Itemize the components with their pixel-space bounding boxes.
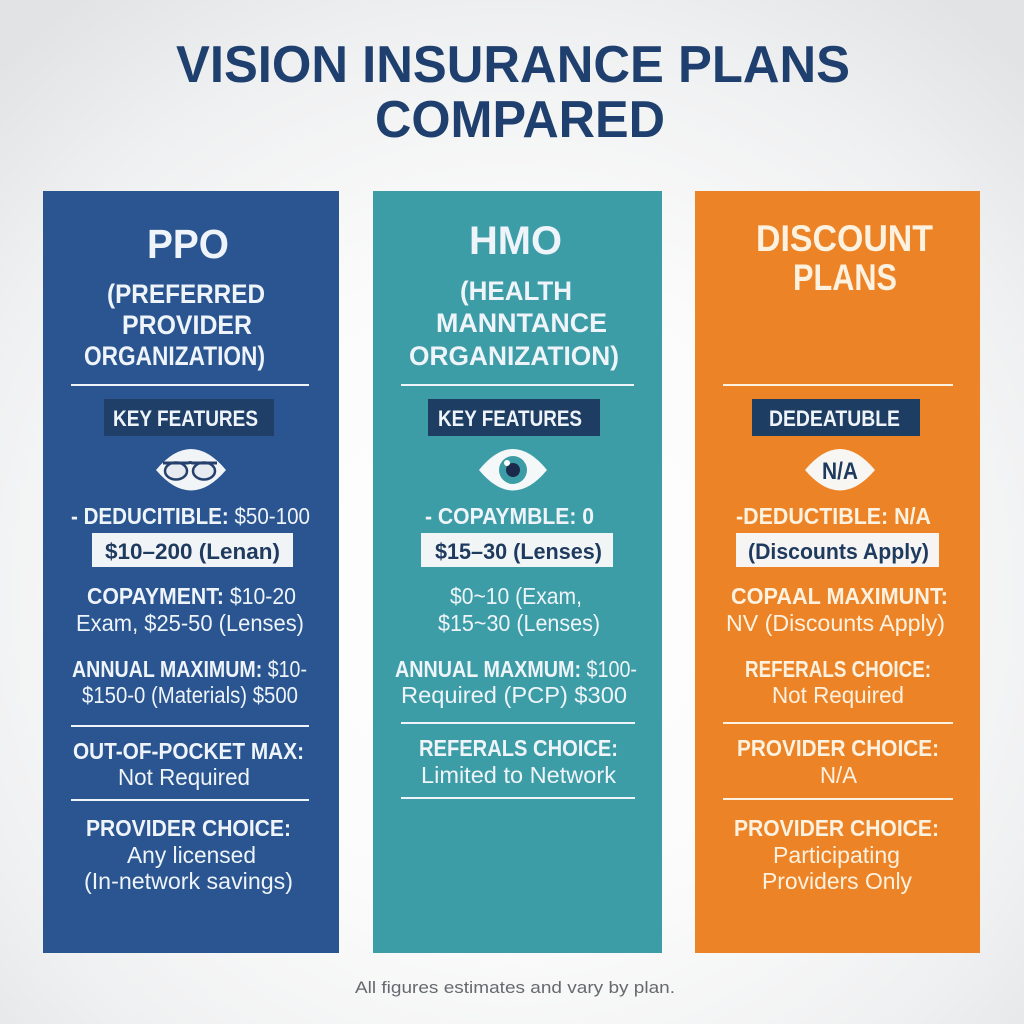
out-of-pocket max: OUT-OF-POCKET MAX: (73, 738, 304, 764)
referrals choice: Limited to Network (421, 762, 617, 788)
HMO heading (409, 219, 619, 371)
footnote: All figures estimates and vary by plan. (355, 978, 675, 997)
PPO heading: PROVIDER (122, 310, 252, 340)
key features badge: KEY FEATURES (438, 406, 582, 431)
Discount Plans heading: PLANS (793, 257, 897, 298)
PPO heading: (PREFERRED (107, 279, 265, 309)
referrals choice (745, 656, 931, 708)
annual maximum: ANNUAL MAXIMUM: $10- (72, 656, 307, 682)
highlight: lenses (92, 533, 293, 567)
PPO heading: PPO (147, 221, 229, 267)
copay maximum: NV (Discounts Apply) (726, 610, 945, 636)
provider choice participating: PROVIDER CHOICE: (734, 815, 939, 841)
HMO heading: MANNTANCE (436, 308, 607, 338)
annual maximum: Required (PCP) $300 (401, 682, 627, 708)
annual maximum: $150-0 (Materials) $500 (82, 682, 298, 708)
highlight: discounts apply (736, 533, 939, 567)
icon: eye (479, 449, 547, 490)
provider choice N/A: N/A (820, 762, 858, 788)
icon: eye with glasses (156, 449, 226, 490)
copay maximum (726, 583, 948, 636)
out-of-pocket max: Not Required (118, 764, 250, 790)
highlight: discounts apply: (Discounts Apply) (748, 539, 929, 564)
highlight: lenses (421, 533, 613, 567)
key features badge (428, 399, 600, 436)
Discount Plans heading: DISCOUNT (756, 218, 933, 259)
out-of-pocket max (73, 738, 304, 790)
dedeatuble badge (752, 399, 920, 436)
key features badge: KEY FEATURES (113, 406, 258, 431)
PPO heading: ORGANIZATION) (84, 341, 265, 371)
annual maximum: ANNUAL MAXMUM: $100- (395, 656, 637, 682)
referrals choice (419, 735, 618, 788)
provider choice (84, 815, 293, 894)
provider choice: Any licensed (127, 842, 256, 868)
highlight: lenses: $15–30 (Lenses) (435, 539, 602, 564)
panel: PPO (43, 191, 339, 953)
HMO heading: (HEALTH (460, 276, 572, 306)
icon: eye with N/A (805, 449, 875, 490)
provider choice N/A (737, 735, 939, 788)
panel: Discount Plans (695, 191, 980, 953)
copayment: Exam, $25-50 (Lenses) (76, 610, 304, 636)
provider choice: (In-network savings) (84, 868, 293, 894)
copayment (76, 583, 304, 636)
provider choice participating: Providers Only (762, 868, 912, 894)
panel: HMO (373, 191, 662, 953)
exam and lenses costs: $15~30 (Lenses) (438, 610, 600, 636)
deductible: - DEDUCITIBLE: $50-100 (71, 503, 310, 529)
referrals choice: Not Required (772, 682, 904, 708)
copay maximum: COPAAL MAXIMUNT: (731, 583, 948, 609)
HMO heading: HMO (469, 219, 562, 263)
title: VISION INSURANCE PLANS (176, 36, 850, 94)
title: COMPARED (375, 91, 665, 149)
dedeatuble badge: DEDEATUBLE (769, 406, 900, 431)
provider choice N/A: PROVIDER CHOICE: (737, 735, 939, 761)
deductible: -DEDUCTIBLE: N/A (736, 503, 931, 529)
provider choice: PROVIDER CHOICE: (86, 815, 291, 841)
title (176, 36, 850, 149)
referrals choice: REFERALS CHOICE: (419, 735, 618, 761)
exam and lenses costs: $0~10 (Exam, (450, 583, 582, 609)
provider choice participating (734, 815, 939, 894)
copayable: - COPAYMBLE: 0 (425, 503, 594, 529)
exam and lenses costs (438, 583, 600, 636)
copayment: COPAYMENT: $10-20 (87, 583, 296, 609)
Discount Plans heading (756, 218, 933, 298)
icon: eye with N/A: N/A (822, 458, 858, 485)
referrals choice: REFERALS CHOICE: (745, 656, 931, 682)
key features badge (104, 399, 274, 436)
PPO heading (84, 221, 265, 371)
annual maximum (395, 656, 637, 708)
provider choice participating: Participating (773, 842, 900, 868)
annual maximum (72, 656, 307, 708)
HMO heading: ORGANIZATION) (409, 341, 619, 371)
highlight: lenses: $10–200 (Lenan) (105, 539, 280, 564)
